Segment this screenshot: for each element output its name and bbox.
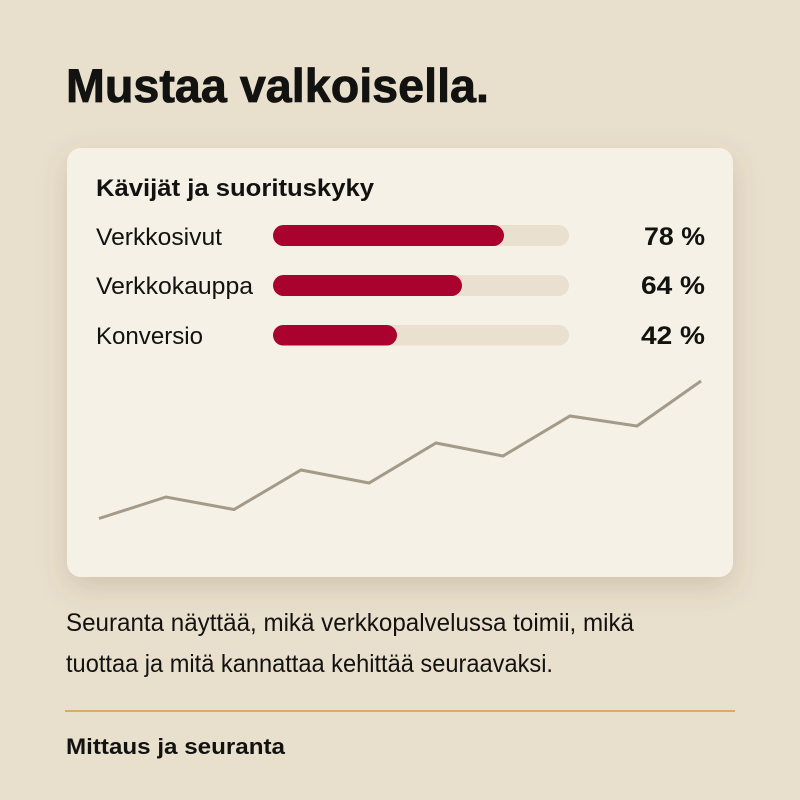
panel: visitors and performance	[67, 148, 733, 577]
bar row: Konversio	[96, 322, 705, 350]
footer label: Mittaus ja seuranta	[66, 734, 286, 759]
description text: tuottaa ja mitä kannattaa kehittää seuraavaksi.	[66, 650, 553, 678]
title: Mustaa valkoisella.	[66, 59, 489, 112]
bar row: Verkkokauppa: 64 %	[641, 272, 705, 300]
bar row: Verkkokauppa	[96, 272, 705, 300]
panel heading: Kävijät ja suorituskyky	[96, 175, 375, 202]
bar row: Verkkosivut: Verkkosivut	[96, 224, 222, 251]
bar row: Verkkosivut	[96, 223, 705, 251]
description text: Seuranta näyttää, mikä verkkopalvelussa toimii, mikä	[66, 609, 634, 637]
bar row: Konversio: 42 %	[641, 322, 705, 350]
line chart	[99, 381, 701, 518]
description text	[66, 609, 634, 678]
bar row: Verkkosivut: 78 %	[644, 223, 705, 251]
bar row: Verkkokauppa: Verkkokauppa	[96, 273, 254, 300]
bar row: Konversio: Konversio	[96, 323, 203, 350]
